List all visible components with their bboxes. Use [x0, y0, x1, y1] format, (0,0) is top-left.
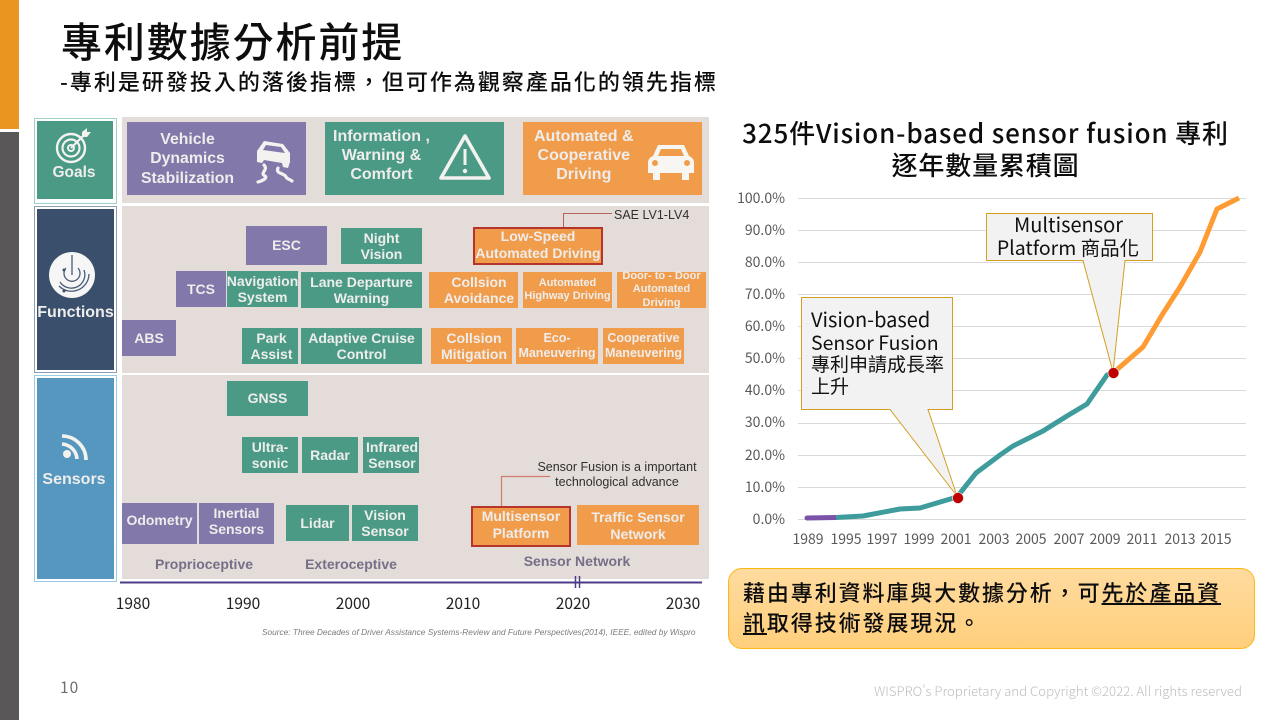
icon: target: [56, 128, 91, 164]
function: Collision Avoidance: [429, 272, 518, 308]
y axis labels: 10.0%: [745, 477, 785, 497]
icon: warning triangle: [439, 134, 491, 180]
goal: Vehicle Dynamics Stabilization: [127, 122, 306, 195]
y axis labels: 90.0%: [745, 220, 785, 240]
sidebar accent: orange: [0, 0, 19, 129]
row label: Functions: Functions: [37, 304, 114, 321]
x axis labels: 1995: [830, 529, 862, 549]
x axis labels: 2013: [1164, 529, 1196, 549]
icon: skidding car: [256, 141, 294, 184]
function: ABS: ABS: [134, 330, 164, 346]
goal: Information, Warning & Comfort: [325, 122, 504, 195]
function: Eco-Maneuvering: Maneuvering: [518, 346, 596, 360]
y axis labels: 80.0%: [745, 252, 785, 272]
sensor: Traffic Sensor Network: [577, 505, 699, 545]
subtitle: -專利是研發投入的落後指標，但可作為觀察產品化的領先指標: [60, 65, 718, 97]
function: Automated Highway Driving: [523, 272, 612, 308]
function: Collision Avoidance: Avoidance: [444, 290, 514, 306]
row label: Goals: [34, 118, 117, 204]
label: Proprioceptive: Proprioceptive: [155, 556, 253, 572]
function: Lane Departure Warning: Lane Departure: [310, 274, 413, 290]
y axis labels: 20.0%: [745, 445, 785, 465]
sensor: Ultrasonic: Ultra-: [252, 438, 288, 454]
label: Sensor Network: Sensor Network: [524, 553, 630, 569]
function: Collision Mitigation: Mitigation: [441, 346, 507, 362]
function: Door-to-Door Automated Driving: Door- to - Door: [622, 270, 701, 282]
source note: Source: Three Decades of Driver Assistance Systems-Review and Future Perspectives(2014), IEEE, edited by Wispro: [262, 627, 696, 637]
sensor: Radar: Radar: [310, 447, 350, 463]
function: Adaptive Cruise Control: [301, 328, 422, 364]
function: Automated Highway Driving: Highway Driving: [524, 290, 611, 302]
sensor: Ultrasonic: sonic: [252, 455, 288, 471]
function: TCS: [176, 271, 226, 307]
sensor: Inertial Sensors: Inertial: [214, 504, 259, 520]
function: Low-Speed Automated Driving: Automated Driving: [475, 244, 601, 260]
x axis labels: 1997: [866, 529, 898, 549]
sensor: GNSS: GNSS: [248, 390, 287, 406]
annotation: sensor fusion note: [500, 460, 697, 506]
x axis labels: 2007: [1053, 529, 1085, 549]
callout: Multisensor Platform: Multisensor: [1014, 209, 1123, 238]
sensor: GNSS: [227, 381, 308, 416]
sensor: Multisensor Platform: [471, 506, 571, 547]
y axis labels: 0.0%: [753, 509, 785, 529]
callout: Vision-based Sensor Fusion: [802, 298, 957, 496]
marker: 2001: [952, 492, 964, 504]
band: goals: [122, 117, 709, 203]
sensor: Ultrasonic: [242, 437, 298, 473]
y axis labels: 30.0%: [745, 412, 785, 432]
callout: Multisensor Platform: Platform 商品化: [997, 232, 1139, 261]
sensor: Vision Sensor: Sensor: [361, 523, 409, 539]
goal: Automated & Cooperative Driving: [523, 122, 702, 195]
callout: Vision-based Sensor Fusion: Sensor Fusion: [811, 327, 939, 356]
function: ESC: [246, 226, 327, 265]
icon: radar: [49, 252, 95, 298]
row label: Functions: [34, 206, 117, 373]
function: Door-to-Door Automated Driving: [617, 272, 706, 308]
goal: Vehicle Dynamics Stabilization: Vehicle: [160, 131, 215, 148]
function: Night Vision: Night: [364, 230, 399, 246]
sensor: Inertial Sensors: Sensors: [209, 521, 264, 537]
function: Door-to-Door Automated Driving: Driving: [643, 297, 680, 309]
goal: Automated & Cooperative Driving: Cooperative: [538, 147, 630, 164]
function: Collision Mitigation: [431, 328, 512, 364]
callout: conclusion: 訊取得技術發展現況。: [743, 606, 982, 638]
function: Cooperative Maneuvering: [603, 328, 684, 364]
axis year: 2030: 2030: [666, 592, 700, 614]
annotation: SAE LV1-LV4: SAE LV1-LV4: [614, 208, 689, 222]
x axis labels: 1999: [903, 529, 935, 549]
band: functions: [122, 206, 709, 373]
sensor: Odometry: Odometry: [126, 512, 193, 528]
sidebar accent: gray: [0, 132, 19, 720]
row label: Sensors: Sensors: [42, 471, 106, 488]
function: Low-Speed Automated Driving: Low-Speed: [501, 228, 575, 244]
function: TCS: TCS: [187, 281, 215, 297]
callout: Vision-based Sensor Fusion: Vision-based: [811, 304, 930, 333]
function: Cooperative Maneuvering: Maneuvering: [605, 346, 682, 360]
function: Eco-Maneuvering: Eco-: [543, 330, 571, 344]
x axis labels: [792, 529, 1232, 549]
function: Adaptive Cruise Control: Control: [337, 346, 386, 362]
chart title: [742, 114, 1229, 183]
y axis labels: 50.0%: [745, 348, 785, 368]
callout: Multisensor Platform: [986, 209, 1152, 372]
goal: Information, Warning & Comfort: Comfort: [350, 166, 413, 183]
timeline axis: [120, 576, 702, 588]
x axis labels: 2005: [1015, 529, 1047, 549]
series: teal segment: [836, 373, 1113, 518]
label: Exteroceptive: Exteroceptive: [305, 556, 397, 572]
sensor: Odometry: [122, 503, 197, 544]
sensor: Infrared Sensor: Infrared: [366, 438, 418, 454]
sensor: Multisensor Platform: Platform: [493, 524, 549, 540]
axis year: 2010: 2010: [446, 592, 480, 614]
callout: Vision-based Sensor Fusion: 上升: [811, 372, 849, 399]
callout: Vision-based Sensor Fusion: 專利申請成長率: [811, 350, 944, 377]
title: 專利數據分析前提: [61, 9, 404, 69]
chart title: 逐年數量累積圖: [892, 146, 1079, 183]
sensor: Multisensor Platform: Multisensor: [482, 508, 560, 524]
sensor: Traffic Sensor Network: Network: [610, 526, 666, 542]
goal: Vehicle Dynamics Stabilization: Dynamics: [150, 150, 225, 167]
callout: conclusion: 藉由專利資料庫與大數據分析，可先於產品資: [743, 576, 1221, 608]
function: Lane Departure Warning: Warning: [334, 290, 389, 306]
function: Park Assist: Park: [256, 330, 287, 346]
function: Night Vision: [341, 228, 422, 264]
function: Cooperative Maneuvering: Cooperative: [607, 330, 680, 344]
function: Low-Speed Automated Driving: [473, 227, 603, 265]
function: Park Assist: Assist: [250, 346, 293, 362]
x axis labels: 2001: [940, 529, 972, 549]
sensor: Infrared Sensor: Sensor: [368, 455, 416, 471]
goal: Information, Warning & Comfort: Information ,: [333, 128, 430, 145]
function: Eco-Maneuvering: [516, 328, 598, 364]
sensor: Traffic Sensor Network: Traffic Sensor: [591, 509, 685, 525]
annotation: SAE LV1-LV4: [563, 208, 689, 227]
icon: signal: [62, 434, 88, 460]
sensor: Vision Sensor: [352, 505, 418, 541]
y axis labels: 100.0%: [737, 188, 785, 208]
x axis labels: 2015: [1200, 529, 1232, 549]
x axis labels: 2011: [1126, 529, 1158, 549]
sensor: Infrared Sensor: [363, 437, 419, 473]
function: Automated Highway Driving: Automated: [539, 276, 596, 288]
sensor: Vision Sensor: Vision: [364, 506, 406, 522]
goal: Vehicle Dynamics Stabilization: Stabilization: [141, 170, 234, 187]
function: Collision Avoidance: Collsion: [451, 274, 507, 290]
x axis labels: 1989: [792, 529, 824, 549]
series: orange segment: [1113, 198, 1239, 373]
axis year: 2020: 2020: [556, 592, 590, 614]
x axis labels: 2003: [978, 529, 1010, 549]
function: Night Vision: Vision: [361, 246, 402, 262]
axis year: 2000: 2000: [336, 592, 370, 614]
axis year: 1990: 1990: [226, 592, 260, 614]
x axis labels: 2009: [1089, 529, 1121, 549]
marker: 2009: [1108, 368, 1119, 378]
function: Adaptive Cruise Control: Adaptive Cruise: [308, 330, 415, 346]
sensor: Radar: [302, 437, 358, 473]
panel: roadmap diagram: [34, 117, 709, 637]
chart title: 325件Vision-based sensor fusion 專利: [742, 114, 1229, 151]
function: ESC: ESC: [272, 237, 301, 253]
goal: Information, Warning & Comfort: Warning &: [342, 147, 421, 164]
row label: Goals: Goals: [52, 164, 96, 181]
footer copyright: WISPRO's Proprietary and Copyright ©2022. All rights reserved: [874, 681, 1242, 700]
sensor: Lidar: [286, 505, 349, 541]
function: ABS: [122, 320, 176, 356]
page number: 10: [60, 676, 79, 698]
function: Park Assist: [242, 328, 298, 364]
annotation: sensor fusion note: technological advance: [555, 475, 679, 489]
function: Navigation System: System: [238, 289, 287, 305]
y axis labels: 70.0%: [745, 284, 785, 304]
row label: Sensors: [34, 375, 117, 582]
function: Navigation System: [227, 271, 298, 307]
annotation: sensor fusion note: Sensor Fusion is a important: [537, 460, 697, 474]
function: Lane Departure Warning: [301, 272, 422, 308]
y axis labels: [737, 188, 785, 529]
function: Collision Mitigation: Collsion: [446, 330, 502, 346]
y axis labels: 40.0%: [745, 380, 785, 400]
icon: car: [648, 145, 694, 180]
goal: Automated & Cooperative Driving: Driving: [556, 166, 611, 183]
y axis labels: 60.0%: [745, 316, 785, 336]
goal: Automated & Cooperative Driving: Automated &: [534, 128, 634, 145]
function: Navigation System: Navigation: [227, 272, 298, 288]
band: sensors: [122, 375, 709, 579]
sensor: Lidar: Lidar: [300, 515, 335, 531]
axis year: 1980: 1980: [116, 592, 150, 614]
function: Door-to-Door Automated Driving: Automated: [633, 283, 690, 295]
series: purple segment: [807, 515, 836, 520]
sensor: Inertial Sensors: [199, 503, 274, 544]
callout: conclusion: [728, 568, 1255, 649]
